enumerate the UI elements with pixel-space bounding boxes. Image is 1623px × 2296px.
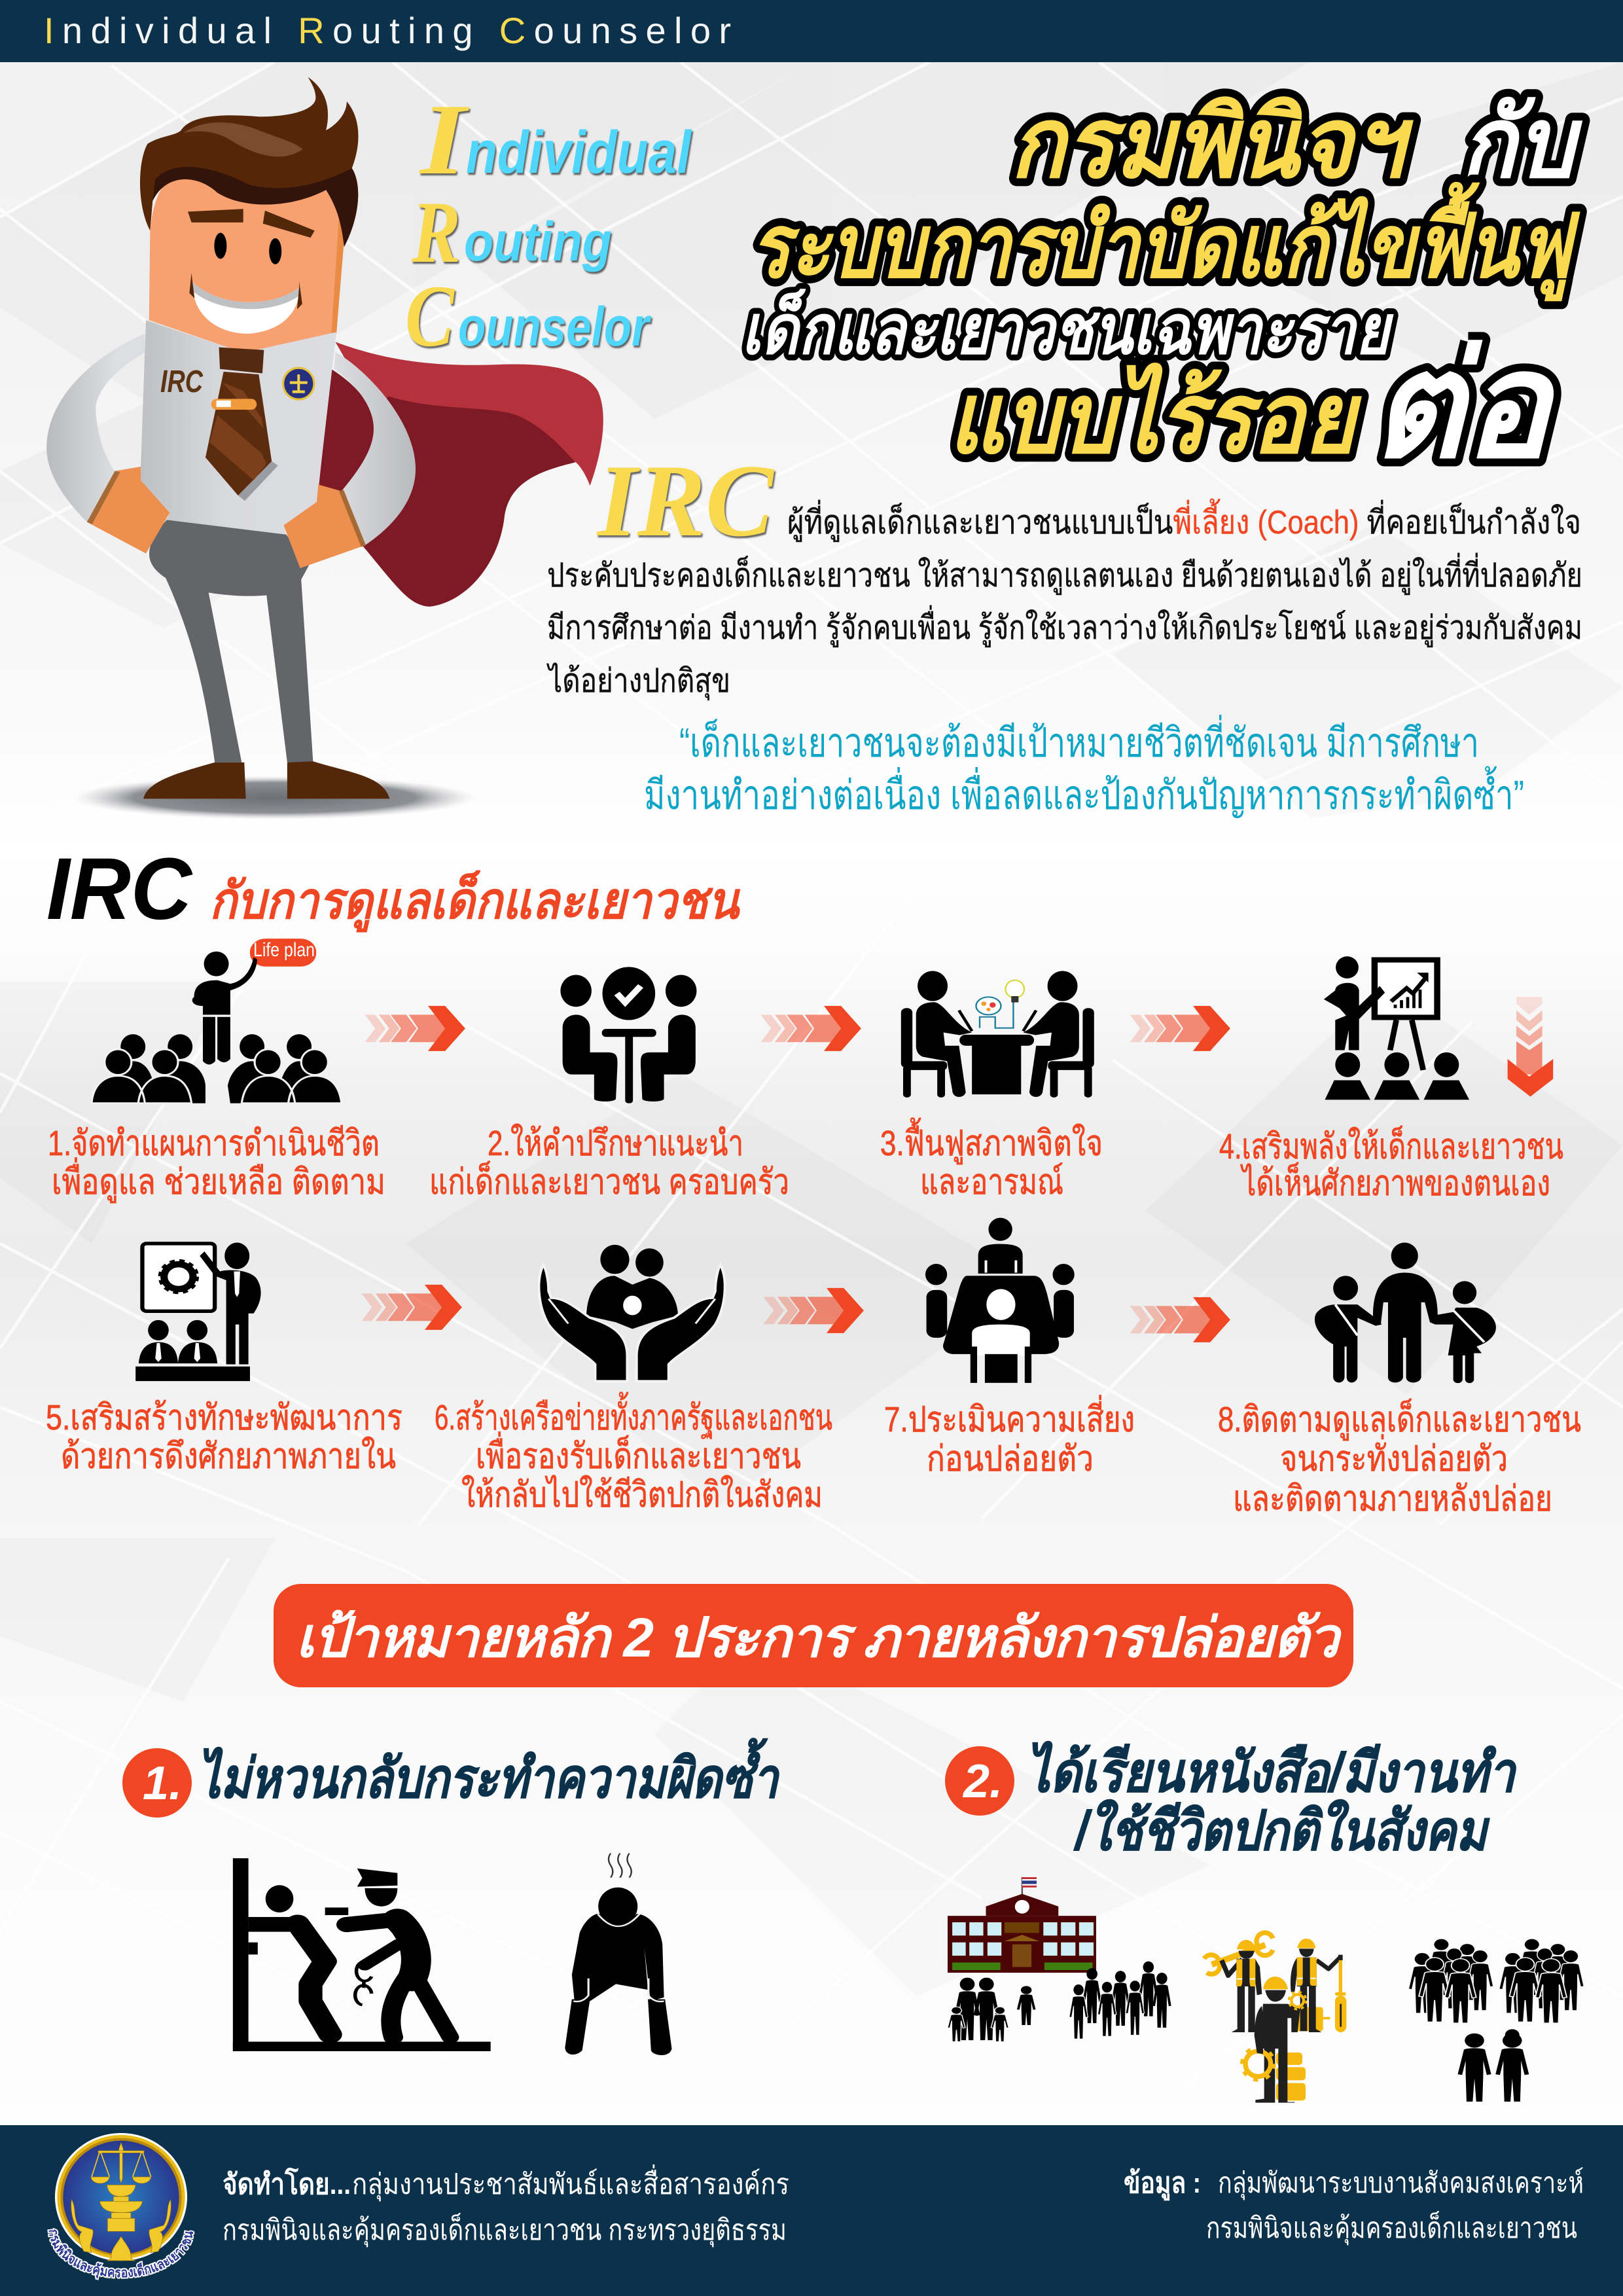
IRC definition paragraph: ผู้ที่ดูแลเด็กและเยาวชนแบบเป็นพี่เลี้ยง (Coach) ที่คอยเป็นกำลังใจ [787, 499, 1581, 542]
icon 8: adult and two children [1315, 1243, 1496, 1383]
IRC acronym word art: outing [464, 211, 612, 272]
section heading: IRC care: IRC [46, 840, 193, 938]
icon 7: risk assessment meeting [925, 1218, 1075, 1383]
department logo: กรมพินิจและคุ้มครองเด็กและเยาวชน [47, 2228, 195, 2280]
step labels row 2: ก่อนปล่อยตัว [927, 1439, 1094, 1479]
icon 6: network hands holding family [539, 1245, 725, 1381]
step labels row 2: เพื่อรองรับเด็กและเยาวชน [476, 1431, 801, 1476]
step labels row 2 [46, 1392, 1581, 1518]
step labels row 2: 6.สร้างเครือข่ายทั้งภาครัฐและเอกชน [435, 1392, 832, 1439]
IRC acronym word art: R [411, 184, 461, 281]
goal 1 heading [122, 1738, 780, 1818]
top header bar: Individual Routing Counselor [44, 10, 731, 51]
icon 4: empowerment presentation [1324, 956, 1469, 1100]
goal 2 heading: /ใช้ชีวิตปกติในสังคม [1073, 1799, 1490, 1861]
step labels row 1: ได้เห็นศักยภาพของตนเอง [1240, 1162, 1550, 1203]
step labels row 1: 3.ฟื้นฟูสภาพจิตใจ [880, 1118, 1103, 1164]
footer bar: กรมพินิจและคุ้มครองเด็กและเยาวชน กระทรวงยุติธรรม [223, 2213, 787, 2248]
superhero mascot character [46, 77, 603, 819]
IRC acronym word art [405, 83, 692, 365]
goal 2 heading: 2. [962, 1755, 1003, 1808]
goal 2 icon: people in society [1408, 1939, 1584, 2102]
main title: แบบไร้รอย [948, 362, 1363, 473]
arrow 1 to 2 [365, 1006, 465, 1051]
goal 2 heading: ได้เรียนหนังสือ/มีงานทำ [1026, 1741, 1517, 1803]
goal 1 heading: ไม่หวนกลับกระทำความผิดซ้ำ [198, 1738, 780, 1809]
goal 2 heading [945, 1741, 1517, 1861]
department logo [47, 2133, 195, 2280]
icon 1: life plan presenter and audience: Life plan [253, 939, 315, 961]
IRC acronym word art: ounselor [458, 296, 652, 357]
arrow 7 to 8 [1130, 1297, 1230, 1342]
step labels row 1 [48, 1118, 1563, 1203]
step labels row 2: 7.ประเมินความเสี่ยง [884, 1395, 1135, 1439]
IRC definition paragraph [546, 444, 1582, 700]
step labels row 1: แก่เด็กและเยาวชน ครอบครัว [429, 1161, 789, 1202]
IRC definition paragraph: IRC [596, 444, 775, 558]
shirt IRC badge text: IRC [160, 365, 204, 399]
goal 1 icon: dejected person [565, 1854, 671, 2055]
main title: ต่อ [1371, 323, 1557, 488]
goals banner [274, 1584, 1353, 1687]
IRC definition paragraph: ได้อย่างปกติสุข [546, 662, 730, 700]
arrow 3 to 4 [1130, 1006, 1230, 1051]
footer bar: กลุ่มงานประชาสัมพันธ์และสื่อสารองค์กร [352, 2164, 789, 2202]
step labels row 2: 5.เสริมสร้างทักษะพัฒนาการ [46, 1398, 402, 1437]
goal 1 icon: police arrest [233, 1858, 491, 2051]
step labels row 1: และอารมณ์ [920, 1162, 1063, 1202]
goal 2 icon: workers with tools [1204, 1933, 1346, 2103]
section heading: IRC care [46, 840, 740, 938]
goal 1 heading: 1. [143, 1757, 182, 1810]
step labels row 1: 1.จัดทำแผนการดำเนินชีวิต [48, 1124, 380, 1163]
step labels row 2: ให้กลับไปใช้ชีวิตปกติในสังคม [461, 1475, 823, 1515]
step labels row 1: 2.ให้คำปรึกษาแนะนำ [488, 1123, 743, 1163]
goals banner: เป้าหมายหลัก 2 ประการ ภายหลังการปล่อยตัว [296, 1607, 1342, 1668]
downward arrow [1508, 997, 1553, 1096]
goal 2 icon: school and students [948, 1877, 1171, 2041]
icon 1: life plan presenter and audience [92, 939, 342, 1103]
main title: กับ [1461, 88, 1583, 198]
icon 5: skill development trainer [135, 1243, 261, 1381]
main title: เด็กและเยาวชนเฉพาะราย [741, 289, 1394, 368]
section heading: IRC care: กับการดูแลเด็กและเยาวชน [209, 870, 740, 933]
main title: กรมพินิจฯ [1010, 88, 1414, 198]
icon 2: counselling at table [560, 967, 696, 1103]
icon 3: mental recovery session [901, 971, 1094, 1098]
footer bar [0, 2125, 1623, 2296]
step labels row 2: จนกระทั่งปล่อยตัว [1280, 1434, 1508, 1479]
step labels row 2: และติดตามภายหลังปล่อย [1233, 1479, 1552, 1518]
IRC acronym word art: C [405, 268, 455, 365]
step labels row 2: ด้วยการดึงศักยภาพภายใน [61, 1436, 396, 1476]
quote [644, 715, 1524, 818]
arrow 5 to 6 [362, 1285, 462, 1330]
IRC acronym word art: ndividual [466, 119, 692, 186]
step labels row 1: เพื่อดูแล ช่วยเหลือ ติดตาม [52, 1157, 385, 1203]
arrow 2 to 3 [761, 1006, 861, 1051]
IRC acronym word art: I [419, 83, 469, 196]
footer bar: ข้อมูล : [1124, 2167, 1201, 2200]
arrow 6 to 7 [764, 1288, 864, 1333]
footer bar: จัดทำโดย... [223, 2166, 351, 2200]
top header bar [0, 0, 1623, 62]
main title [741, 88, 1583, 488]
